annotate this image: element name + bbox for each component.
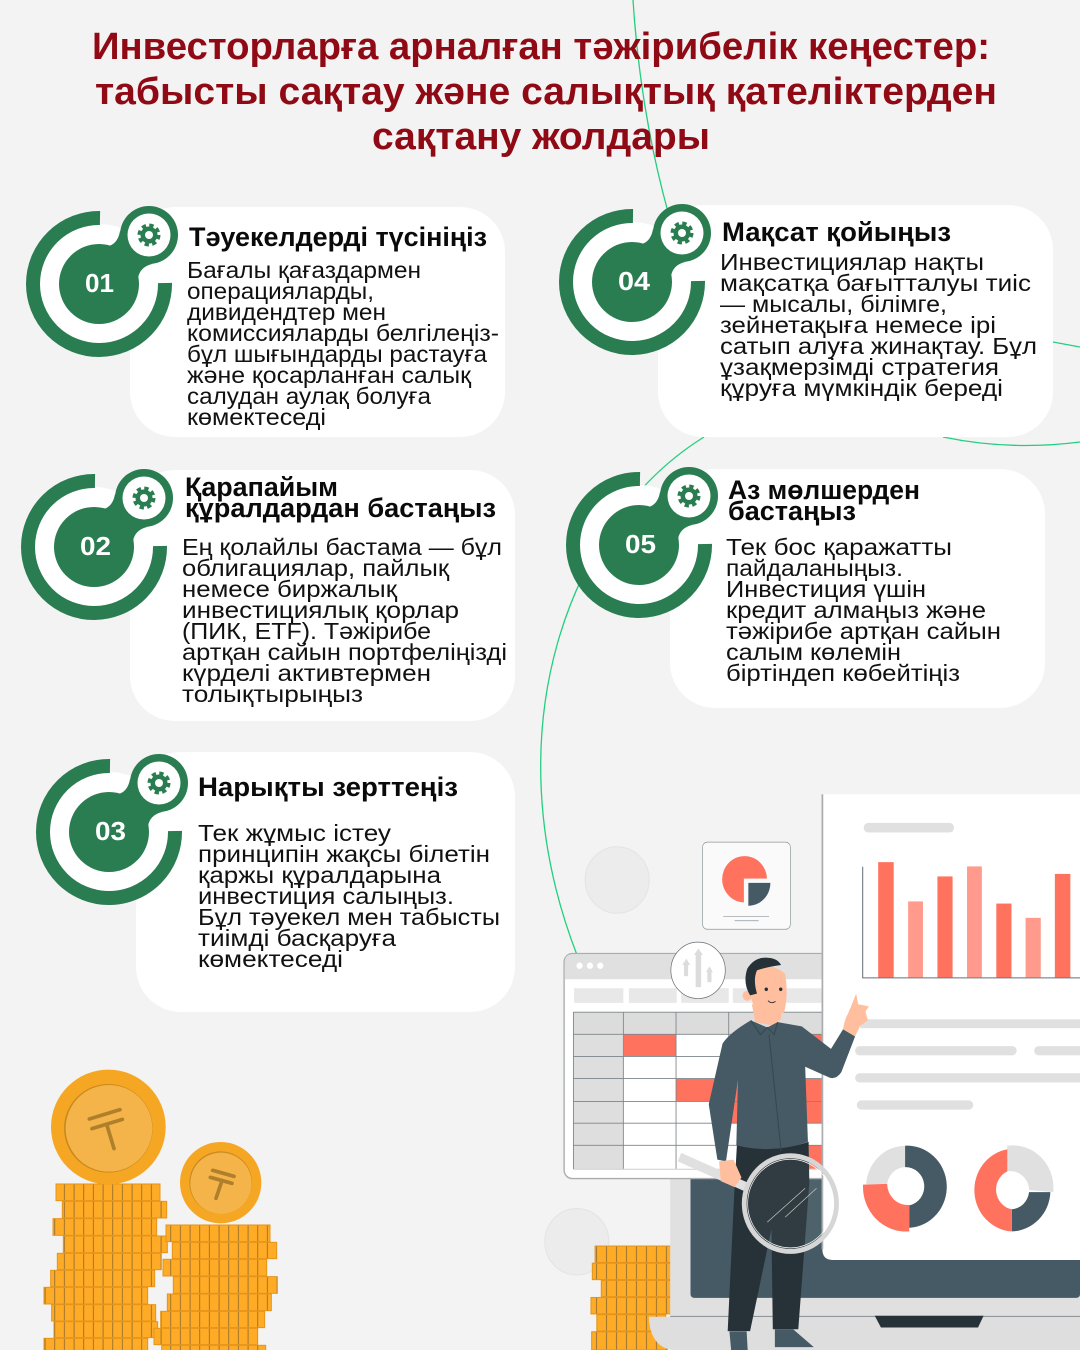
- magnifier: [744, 1156, 837, 1251]
- man figure: [679, 958, 869, 1350]
- text: step 02: (ПИК, ETF). Тәжірибе: [182, 618, 431, 644]
- text: step 04: сатып алуға жинақтау. Бұл: [720, 333, 1037, 359]
- icon: small tenge coin: [180, 1142, 261, 1223]
- text: step 03: тиімді басқаруға: [198, 925, 397, 951]
- panel: step 05: [573, 467, 1045, 708]
- icon: badge 05: 05: [625, 529, 656, 559]
- pie chart card: [703, 842, 790, 929]
- arrows bubble: [671, 942, 725, 999]
- laptop: [649, 1169, 1080, 1350]
- trousers: [728, 1142, 809, 1331]
- panel: step 01: [33, 206, 505, 437]
- icon: badge 04: [566, 204, 711, 348]
- illustration: analyst with charts: [545, 794, 1080, 1350]
- text: step 05: кредит алмаңыз және: [726, 597, 986, 623]
- text: step 05: салым көлемін: [726, 639, 901, 665]
- shoes: [729, 1329, 814, 1350]
- text: step 04: құруға мүмкіндік береді: [720, 375, 1003, 401]
- text: step 02: артқан сайын портфеліңізді: [182, 639, 507, 665]
- text: step 02: күрделі активтермен: [182, 660, 431, 686]
- text: step 03: көмектеседі: [198, 946, 343, 972]
- icon: badge 05: [573, 467, 718, 611]
- coin stack: right: [154, 1225, 277, 1350]
- heading: step 01: Тәуекелдерді түсініңіз: [189, 222, 487, 252]
- text: step 03: инвестиция салыңыз.: [198, 883, 454, 909]
- pointing hand: [843, 994, 869, 1036]
- heading: step 04: Мақсат қойыңыз: [722, 217, 951, 247]
- coin stack: laptop side: [591, 1246, 674, 1350]
- text: step 01: [187, 257, 499, 430]
- magnifier handle: [679, 1157, 747, 1187]
- hair: [745, 958, 781, 995]
- text: step 05: біртіндеп көбейтіңіз: [726, 660, 960, 686]
- text: step 05: Инвестиция үшін: [726, 576, 926, 602]
- text: step 02: [182, 534, 507, 707]
- title: Инвесторларға арналған тәжірибелік кеңестер:: [92, 26, 990, 68]
- text: step 05: тәжірибе артқан сайын: [726, 618, 1001, 644]
- text: step 03: [198, 820, 500, 972]
- text: step 03: қаржы құралдарына: [198, 862, 442, 888]
- title: [92, 26, 997, 158]
- icon: badge 03: 03: [95, 816, 126, 846]
- text placeholder bars: [855, 1019, 1080, 1110]
- illustration: tenge coin stacks: [44, 1070, 277, 1350]
- icon: badge 02: 02: [80, 531, 111, 561]
- text: step 02: толықтырыңыз: [182, 681, 363, 707]
- heading: step 05: бастаңыз: [728, 496, 856, 526]
- text: step 01: көмектеседі: [187, 404, 326, 430]
- heading: step 05: Аз мөлшерден: [728, 475, 920, 505]
- text: step 03: Бұл тәуекел мен табысты: [198, 904, 500, 930]
- icon: badge 01: [33, 206, 178, 350]
- title: табысты сақтау және салықтық қателіктерден: [95, 71, 997, 113]
- text: step 01: салудан аулақ болуға: [187, 383, 432, 409]
- text: step 05: Тек бос қаражатты: [726, 534, 952, 560]
- donut chart 1: [863, 1146, 947, 1232]
- title: сақтану жолдары: [372, 116, 710, 158]
- text: step 01: Бағалы қағаздармен: [187, 257, 421, 283]
- neck: [752, 1004, 781, 1026]
- text: step 03: принципін жақсы білетін: [198, 841, 490, 867]
- heading: step 02: құралдардан бастаңыз: [185, 493, 496, 523]
- icon: badge 03: [43, 754, 188, 898]
- face: [751, 966, 787, 1016]
- panel: step 03: [43, 752, 515, 1012]
- heading: step 03: Нарықты зерттеңіз: [198, 772, 458, 802]
- text: step 01: және қосарланған салық: [187, 362, 472, 388]
- icon: badge 01: 01: [85, 268, 114, 298]
- text: step 04: мақсатқа бағытталуы тиіс: [720, 270, 1031, 296]
- panel: step 04: [566, 204, 1053, 437]
- text: step 02: инвестициялық қорлар: [182, 597, 459, 623]
- text: step 04: зейнетақыға немесе ірі: [720, 312, 996, 338]
- coin stack: left: [44, 1184, 167, 1350]
- text: step 01: бұл шығындарды растауға: [187, 341, 488, 367]
- heading: step 02: [185, 472, 496, 523]
- spreadsheet window: [564, 954, 836, 1179]
- donut chart 2: [974, 1145, 1053, 1231]
- text: step 01: операцияларды,: [187, 278, 374, 304]
- text: step 04: [720, 249, 1037, 401]
- icon: badge 04: 04: [618, 266, 651, 296]
- icon: badge 02: [28, 469, 173, 613]
- heading: step 05: [728, 475, 920, 526]
- shirt: [709, 1020, 855, 1161]
- text: step 01: дивидендтер мен: [187, 299, 386, 325]
- bar chart: [863, 862, 1080, 978]
- text: step 02: Ең қолайлы бастама — бұл: [182, 534, 502, 560]
- text: step 05: пайдаланыңыз.: [726, 555, 903, 581]
- text: step 02: немесе биржалық: [182, 576, 398, 602]
- text: step 04: ұзақмерзімді стратегия: [720, 354, 999, 380]
- text: step 02: облигациялар, пайлық: [182, 555, 450, 581]
- heading: step 02: Қарапайым: [185, 472, 338, 502]
- text: step 04: — мысалы, білімге,: [720, 291, 947, 317]
- panel: step 02: [28, 469, 515, 721]
- text: step 04: Инвестициялар нақты: [720, 249, 984, 275]
- text: step 03: Тек жұмыс істеу: [198, 820, 391, 846]
- text: step 01: комиссияларды белгілеңіз-: [187, 320, 499, 346]
- report panel: [822, 794, 1080, 1260]
- decorative green curves: [541, 0, 1080, 955]
- icon: large tenge coin: [51, 1070, 166, 1184]
- background circles: [545, 847, 649, 1275]
- gripping hand: [719, 1160, 741, 1187]
- text: step 05: [726, 534, 1001, 686]
